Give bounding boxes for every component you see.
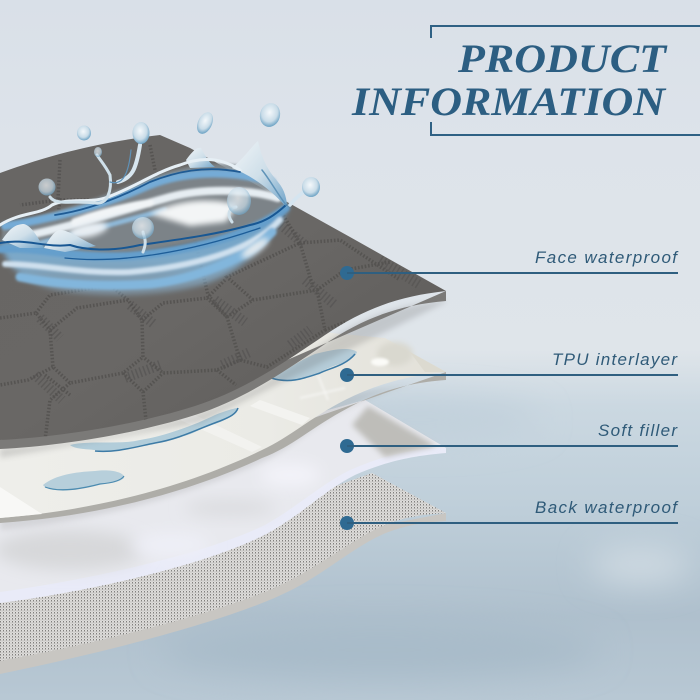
droplet: top right (257, 101, 283, 129)
droplet: top center (194, 110, 216, 136)
callout: face waterproof: Face waterproof (535, 248, 679, 267)
splash base wash (0, 205, 290, 295)
layer: face waterproof quilted fabric (0, 135, 446, 458)
droplet: top left (77, 126, 91, 140)
title: INFORMATION (351, 79, 667, 124)
title (351, 36, 668, 124)
splash inner glass (2, 164, 287, 253)
callout: back waterproof (340, 498, 679, 530)
TPU reflections (0, 342, 446, 518)
quilt stitching (0, 145, 400, 440)
layer: back waterproof (0, 473, 446, 674)
heading frame (431, 26, 700, 135)
splash spikes and necks (50, 145, 306, 252)
callout: soft filler: Soft filler (598, 421, 678, 440)
grey filler texture (0, 406, 436, 570)
splash mounds (2, 141, 287, 252)
water splash crown (0, 101, 320, 295)
layer: soft filler (0, 400, 446, 603)
callout: soft filler (340, 421, 678, 453)
callout: TPU interlayer: TPU interlayer (552, 350, 678, 369)
water puddle: lower (43, 470, 124, 490)
callout: face waterproof (340, 248, 679, 280)
splash wall bands (0, 174, 286, 285)
water puddle: middle (70, 408, 238, 451)
layer: TPU interlayer (0, 330, 446, 530)
splash rim lines (0, 160, 286, 260)
callout: TPU interlayer (340, 350, 678, 382)
callout: back waterproof: Back waterproof (535, 498, 679, 517)
splash highlights (67, 201, 271, 261)
water puddle: upper (271, 349, 357, 381)
droplets on crown (38, 122, 320, 239)
title: PRODUCT (457, 36, 668, 81)
